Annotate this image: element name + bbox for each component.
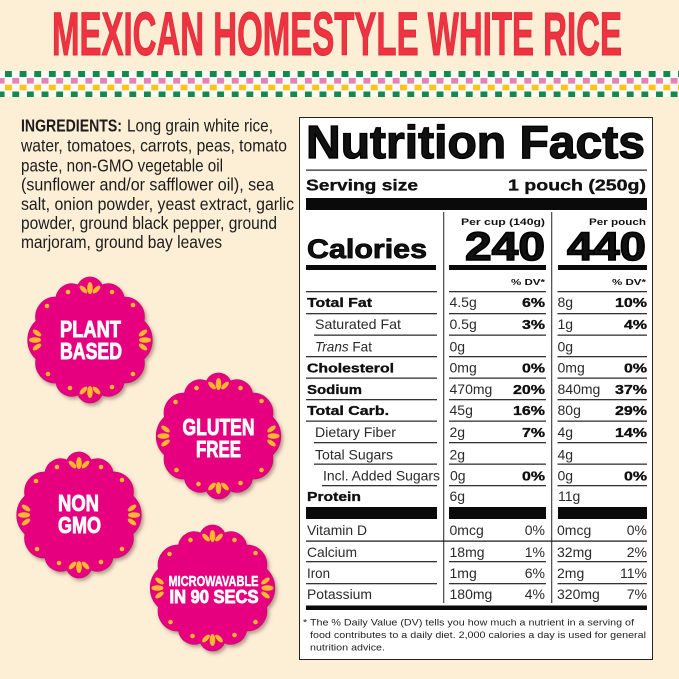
macronutrient rows: 0g <box>450 468 466 484</box>
heading: nutrition facts: Nutrition Facts <box>306 116 645 168</box>
macronutrient rows: 7% <box>522 425 546 440</box>
calories row: % DV* <box>511 277 546 287</box>
macronutrient rows <box>307 294 648 504</box>
macronutrient rows: 10% <box>615 295 648 310</box>
macronutrient rows: 4.5g <box>450 294 477 310</box>
macronutrient rows: 80g <box>558 402 581 418</box>
macronutrient rows: Protein <box>307 489 361 504</box>
macronutrient rows: 6% <box>522 295 546 310</box>
macronutrient rows: 29% <box>615 403 648 418</box>
vitamins and minerals rows: 320mg <box>557 586 600 602</box>
badge: microwavable in 90 secs <box>150 525 275 651</box>
calories row: Per pouch <box>589 217 646 228</box>
panel: nutrition facts <box>300 116 652 660</box>
vitamins and minerals rows: 0% <box>627 522 647 538</box>
vitamins and minerals rows: Calcium <box>307 544 357 560</box>
macronutrient rows: 1g <box>558 316 573 332</box>
vitamins and minerals rows: 2mg <box>557 565 584 581</box>
badge: non gmo <box>17 452 141 578</box>
serving size row: Serving size <box>306 178 418 194</box>
ingredients text block: INGREDIENTS: <box>21 116 122 136</box>
macronutrient rows: 14% <box>615 425 648 440</box>
calories row: Calories <box>307 234 427 264</box>
macronutrient rows: Trans Fat <box>315 338 372 354</box>
vitamins and minerals rows: 2% <box>627 544 647 560</box>
macronutrient rows: Saturated Fat <box>315 316 401 332</box>
macronutrient rows: Cholesterol <box>307 360 394 376</box>
badge: non gmo: GMO <box>58 512 101 538</box>
badge: plant based: PLANT <box>60 316 121 342</box>
footnote: * The % Daily Value (DV) tells you how much a nutrient in a serving of <box>303 618 634 628</box>
ingredients text block: Long grain white rice, <box>127 116 273 136</box>
vitamins and minerals rows: 0mcg <box>557 522 591 538</box>
ingredients text block: marjoram, ground bay leaves <box>21 232 222 252</box>
calories row: Per cup (140g) <box>461 217 545 228</box>
macronutrient rows: Total Carb. <box>307 403 389 418</box>
ingredients text block: salt, onion powder, yeast extract, garlic <box>21 194 294 214</box>
macronutrient rows: 4% <box>624 317 648 332</box>
badge: gluten free <box>156 373 281 499</box>
serving size row: 1 pouch (250g) <box>508 178 646 194</box>
macronutrient rows: 4g <box>558 446 573 462</box>
macronutrient rows: Total Sugars <box>315 446 393 462</box>
macronutrient rows: 3% <box>522 317 546 332</box>
badge: gluten free: GLUTEN <box>182 414 254 440</box>
vitamins and minerals rows: 18mg <box>450 544 485 560</box>
ingredients text block: powder, ground black pepper, ground <box>21 213 277 233</box>
bottom thick rule <box>306 606 647 610</box>
column dividers <box>443 212 552 603</box>
calories row: % DV* <box>612 277 647 287</box>
calories row: 440 <box>567 225 646 269</box>
badge: non gmo: NON <box>58 490 99 516</box>
vitamins and minerals rows <box>307 522 647 602</box>
macronutrient rows: 0g <box>558 338 573 354</box>
vitamins and minerals rows: 180mg <box>450 586 492 602</box>
vitamins and minerals rows: 0% <box>525 522 545 538</box>
macronutrient rows: 4g <box>558 424 573 440</box>
badge: microwavable in 90 secs: MICROWAVABLE <box>168 574 259 590</box>
thick separator bars <box>306 507 647 519</box>
vitamins and minerals rows: 4% <box>525 586 545 602</box>
vitamins and minerals rows: 7% <box>627 586 647 602</box>
badge: plant based: BASED <box>60 338 122 364</box>
ingredients text block: paste, non-GMO vegetable oil <box>21 156 223 176</box>
macronutrient rows: 470mg <box>450 381 492 397</box>
calories row <box>306 217 647 287</box>
badge: plant based <box>28 277 152 403</box>
macronutrient rows: 45g <box>450 402 473 418</box>
calories row: 240 <box>465 225 545 269</box>
ingredients text block <box>20 116 294 252</box>
ingredients text block: (sunflower and/or safflower oil), sea <box>21 174 274 194</box>
macronutrient rows: 11g <box>558 488 580 504</box>
serving size row <box>306 170 647 210</box>
macronutrient rows: 0g <box>450 338 465 354</box>
vitamins and minerals rows: 32mg <box>557 544 592 560</box>
macronutrient rows: 2g <box>450 446 465 462</box>
macronutrient rows: 0% <box>624 468 648 484</box>
macronutrient rows: 840mg <box>558 381 600 397</box>
badge: gluten free: FREE <box>196 436 241 462</box>
macronutrient rows: 0% <box>522 360 546 376</box>
footnote: food contributes to a daily diet. 2,000 calories a day is used for general <box>310 630 646 641</box>
macronutrient rows: Sodium <box>307 382 362 397</box>
macronutrient rows: 0% <box>522 468 546 484</box>
footnote <box>303 618 646 654</box>
vitamins and minerals rows: 1% <box>525 544 545 560</box>
vitamins and minerals rows: 0mcg <box>450 522 484 538</box>
macronutrient rows: 20% <box>513 382 546 397</box>
macronutrient rows: 0mg <box>450 360 477 376</box>
macronutrient rows: Total Fat <box>307 295 373 310</box>
macronutrient rows: 0% <box>624 360 648 376</box>
macronutrient rows: 16% <box>513 403 546 418</box>
vitamins and minerals rows: 1mg <box>450 565 477 581</box>
macronutrient rows: Dietary Fiber <box>315 424 396 440</box>
footnote: nutrition advice. <box>310 642 385 654</box>
ingredients text block: water, tomatoes, carrots, peas, tomato <box>20 136 287 156</box>
macronutrient rows: 2g <box>450 424 465 440</box>
vitamins and minerals rows: Vitamin D <box>307 522 367 538</box>
vitamins and minerals rows: 6% <box>525 565 545 581</box>
macronutrient rows: 0g <box>558 468 573 484</box>
macronutrient rows: 37% <box>615 382 648 397</box>
vitamins and minerals rows: 11% <box>620 565 647 581</box>
macronutrient rows: Incl. Added Sugars <box>323 468 440 484</box>
badge: microwavable in 90 secs: IN 90 SECS <box>170 587 258 607</box>
vitamins and minerals rows: Iron <box>307 565 330 581</box>
checkered decorative band <box>0 71 679 97</box>
macronutrient rows: 8g <box>558 294 573 310</box>
row separators <box>306 291 647 584</box>
macronutrient rows: 0.5g <box>450 316 477 332</box>
macronutrient rows: 0mg <box>558 360 585 376</box>
vitamins and minerals rows: Potassium <box>307 586 372 602</box>
macronutrient rows: 6g <box>450 488 465 504</box>
